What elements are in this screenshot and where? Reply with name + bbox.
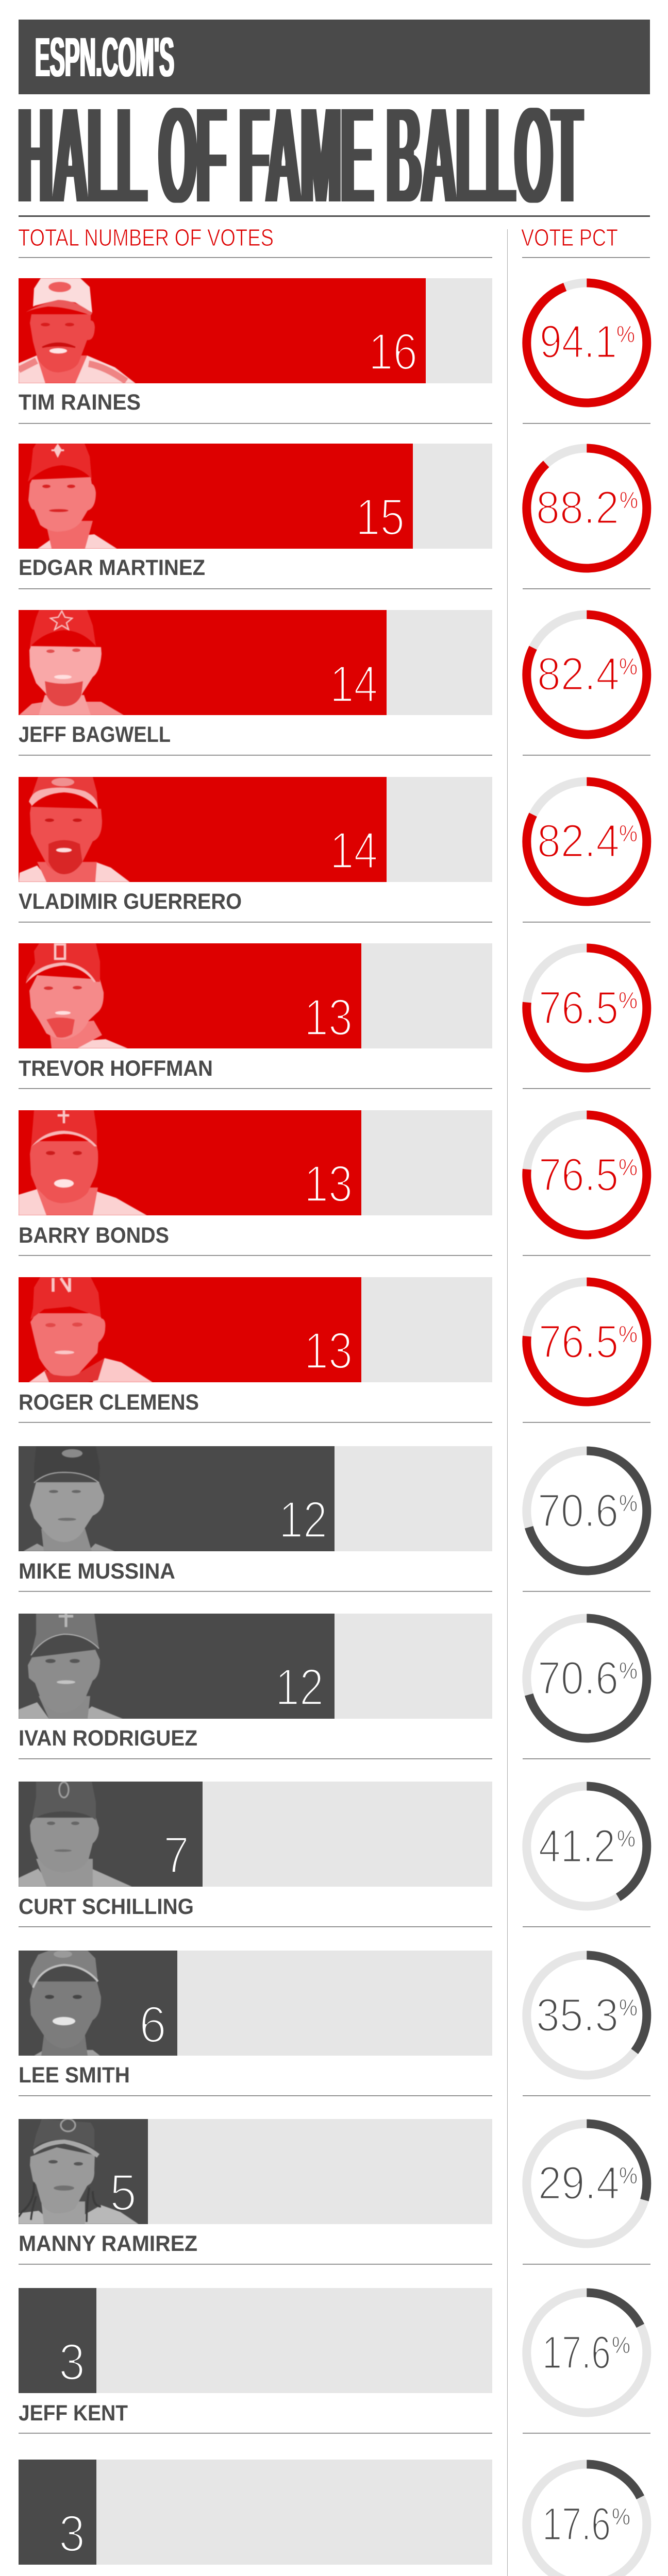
- name: JEFF KENT: [19, 2401, 128, 2426]
- name: IVAN RODRIGUEZ: [19, 1726, 197, 1751]
- photo: Tim Raines: [19, 278, 136, 383]
- donut: vote pct: %: [616, 321, 635, 347]
- vote count: 3: [59, 2333, 85, 2391]
- photo: Curt Schilling: [19, 1782, 132, 1887]
- donut: vote pct: %: [619, 1994, 638, 2021]
- vote bar: [19, 943, 492, 1048]
- row: Manny Ramirez: [19, 2119, 650, 2265]
- photo: Barry Bonds: [19, 1110, 147, 1215]
- donut: vote pct: %: [619, 820, 638, 846]
- donut: vote pct: [527, 1955, 647, 2075]
- vote bar: [19, 278, 492, 383]
- vote count: 6: [139, 1996, 166, 2054]
- donut: vote pct: 17.6: [542, 2499, 611, 2550]
- photo: Roger Clemens: [29, 1277, 153, 1382]
- donut: vote pct: [527, 2124, 647, 2244]
- donut: vote pct: [527, 448, 647, 568]
- row: Fred McGriff: [19, 2460, 650, 2576]
- vote bar: [19, 1614, 492, 1719]
- donut: vote pct: [527, 1282, 647, 1402]
- donut: vote pct: [527, 948, 647, 1068]
- donut: vote pct: [527, 283, 647, 403]
- name: MIKE MUSSINA: [19, 1559, 175, 1584]
- row: Jeff Kent: [19, 2288, 650, 2434]
- photo: Edgar Martinez: [28, 444, 117, 549]
- name: MANNY RAMIREZ: [19, 2231, 197, 2256]
- header band: ESPN.COM'S: [35, 26, 174, 88]
- donut: vote pct: 70.6: [538, 1485, 619, 1537]
- name: LEE SMITH: [19, 2063, 130, 2088]
- vote count: 14: [330, 655, 378, 713]
- row: Roger Clemens: [19, 1277, 650, 1423]
- donut: vote pct: [527, 1451, 647, 1571]
- vote bar: [19, 1277, 492, 1382]
- photo: Lee Smith: [29, 1951, 101, 2056]
- donut: vote pct: 76.5: [539, 982, 619, 1034]
- donut: vote pct: %: [619, 2162, 638, 2189]
- row: Curt Schilling: [19, 1782, 650, 1927]
- photo: Mike Mussina: [23, 1446, 115, 1551]
- vote bar: [19, 2119, 492, 2224]
- name: EDGAR MARTINEZ: [19, 555, 205, 580]
- name: TREVOR HOFFMAN: [19, 1056, 213, 1081]
- donut: vote pct: %: [619, 987, 638, 1013]
- vote bar: [19, 1110, 492, 1215]
- donut: vote pct: %: [619, 1657, 638, 1684]
- donut: vote pct: 82.4: [537, 649, 620, 700]
- photo: Ivan Rodriguez: [19, 1614, 123, 1719]
- donut: vote pct: %: [619, 1490, 638, 1516]
- row: Vladimir Guerrero: [19, 777, 650, 922]
- photo: Jeff Bagwell: [19, 610, 124, 715]
- donut: vote pct: 76.5: [539, 1316, 619, 1368]
- row: Mike Mussina: [19, 1446, 650, 1592]
- donut: vote pct: [527, 2293, 647, 2413]
- photo: Vladimir Guerrero: [19, 777, 130, 882]
- donut: vote pct: [527, 2464, 647, 2576]
- vote bar: [19, 777, 492, 882]
- donut: vote pct: [527, 782, 647, 902]
- donut: vote pct: %: [612, 2332, 630, 2358]
- name: ROGER CLEMENS: [19, 1390, 199, 1415]
- donut: vote pct: %: [619, 1321, 638, 1347]
- donut: vote pct: 35.3: [536, 1990, 619, 2041]
- row: Jeff Bagwell: [19, 610, 650, 755]
- donut: vote pct: %: [612, 2503, 630, 2530]
- vote bar: [19, 1782, 492, 1887]
- row: Lee Smith: [19, 1951, 650, 2096]
- vote count: 7: [163, 1826, 189, 1884]
- vote bar: [19, 2288, 492, 2393]
- name: CURT SCHILLING: [19, 1894, 194, 1919]
- name: VLADIMIR GUERRERO: [19, 889, 242, 914]
- donut: vote pct: 17.6: [542, 2327, 611, 2379]
- row: Ivan Rodriguez: [19, 1614, 650, 1759]
- vote count: 14: [330, 822, 378, 879]
- column heading: vote pct: VOTE PCT: [521, 224, 618, 251]
- donut: vote pct: 29.4: [538, 2158, 620, 2209]
- donut: vote pct: [527, 1618, 647, 1738]
- row: Barry Bonds: [19, 1110, 650, 1256]
- row: Trevor Hoffman: [19, 943, 650, 1089]
- vote bar: [19, 444, 492, 549]
- photo: Trevor Hoffman: [26, 943, 128, 1048]
- name: TIM RAINES: [19, 390, 141, 415]
- row: Edgar Martinez: [19, 444, 650, 589]
- donut: vote pct: 70.6: [538, 1653, 619, 1704]
- header band: [19, 20, 650, 94]
- donut: vote pct: %: [619, 653, 638, 680]
- donut: vote pct: 82.4: [537, 816, 620, 867]
- vote count: 5: [110, 2164, 137, 2222]
- column heading: total number of votes: TOTAL NUMBER OF VOTES: [18, 224, 274, 251]
- vote count: 13: [304, 1322, 353, 1380]
- vote bar: [19, 610, 492, 715]
- vote count: 16: [369, 323, 417, 381]
- photo: Manny Ramirez: [19, 2119, 139, 2224]
- donut: vote pct: %: [620, 487, 638, 513]
- donut: vote pct: 76.5: [539, 1149, 619, 1201]
- donut: vote pct: %: [619, 1154, 638, 1180]
- name: BARRY BONDS: [19, 1223, 169, 1248]
- donut: vote pct: [527, 1115, 647, 1235]
- donut: vote pct: 41.2: [539, 1821, 615, 1872]
- row: Tim Raines: [19, 278, 650, 423]
- vote count: 12: [279, 1491, 327, 1549]
- vote count: 3: [59, 2505, 85, 2563]
- donut: vote pct: 94.1: [540, 316, 617, 368]
- vote count: 15: [356, 488, 405, 546]
- donut: vote pct: %: [617, 1825, 636, 1852]
- vote count: 13: [304, 1155, 353, 1213]
- donut: vote pct: 88.2: [536, 482, 619, 534]
- donut: vote pct: [527, 615, 647, 735]
- vote bar: [19, 1951, 492, 2056]
- vote count: 13: [304, 989, 353, 1046]
- vote count: 12: [275, 1658, 324, 1716]
- donut: vote pct: [527, 1786, 647, 1906]
- vote bar: [19, 1446, 492, 1551]
- name: JEFF BAGWELL: [19, 722, 171, 747]
- vote bar: [19, 2460, 492, 2565]
